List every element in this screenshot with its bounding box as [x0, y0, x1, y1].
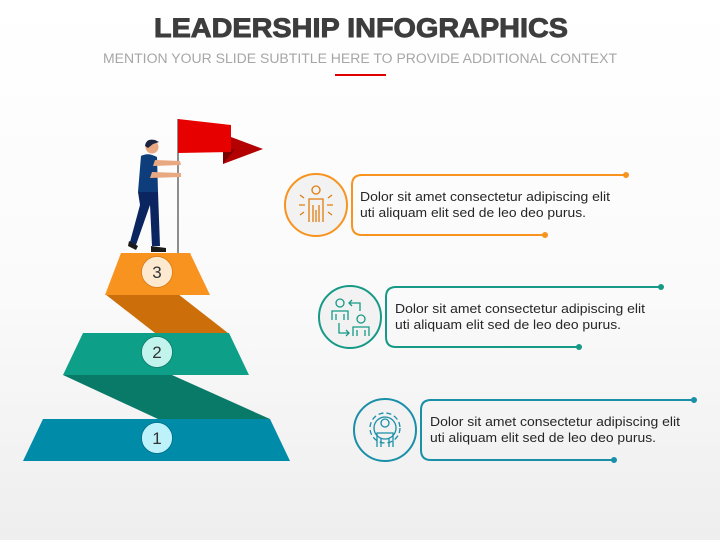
- card 2: [319, 284, 664, 350]
- number 1: [142, 422, 172, 454]
- number 2: [142, 336, 172, 368]
- text 3: Dolor sit amet consectetur adipiscing elit: [430, 414, 680, 429]
- ribbon orange: [105, 294, 228, 333]
- red accent line: [335, 74, 386, 76]
- subtitle: MENTION YOUR SLIDE SUBTITLE HERE TO PROVIDE ADDITIONAL CONTEXT: [103, 51, 617, 66]
- text 3: uti aliquam elit sed de leo deo purus.: [430, 430, 656, 445]
- icon: exchange people: [319, 286, 381, 348]
- text 2: Dolor sit amet consectetur adipiscing elit: [395, 301, 645, 316]
- title: LEADERSHIP INFOGRAPHICS: [154, 13, 568, 43]
- number 3: [142, 256, 172, 288]
- card frame 2: [386, 287, 661, 347]
- number 2: 2: [152, 343, 162, 362]
- tier 2: [63, 333, 249, 375]
- icon: person with arrows: [285, 174, 347, 236]
- pyramid: [23, 253, 290, 461]
- card 3: [354, 397, 697, 463]
- card frame 3: [421, 400, 694, 460]
- number 3: 3: [152, 263, 162, 282]
- icon: gear person: [354, 399, 416, 461]
- text 1: uti aliquam elit sed de leo deo purus.: [360, 205, 586, 220]
- card frame 1: [352, 175, 626, 235]
- flag: [178, 119, 263, 253]
- person: [128, 140, 181, 252]
- tier 3: [105, 253, 210, 295]
- text 1: Dolor sit amet consectetur adipiscing elit: [360, 189, 610, 204]
- ribbon green: [63, 375, 270, 419]
- card 1: [285, 172, 629, 238]
- tier 1: [23, 419, 290, 461]
- text 2: uti aliquam elit sed de leo deo purus.: [395, 317, 621, 332]
- number 1: 1: [152, 429, 162, 448]
